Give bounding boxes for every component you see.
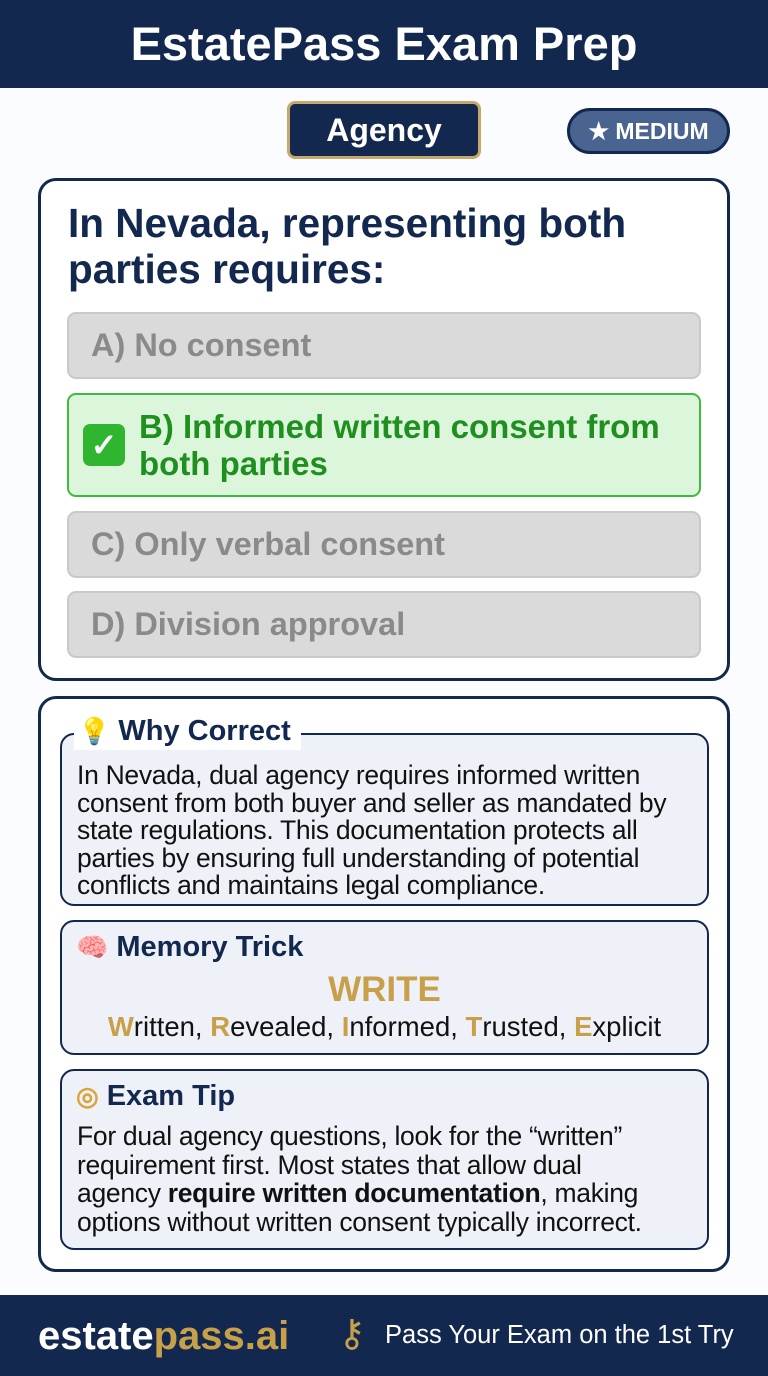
panel: explanation card (38, 696, 730, 1272)
heading: exam tip: ◎ (76, 1081, 99, 1111)
box: why correct: state regulations. This documentation protects all (77, 815, 637, 845)
exam tip text (77, 1121, 642, 1236)
exam tip text: agency require written documentation, making (77, 1178, 638, 1208)
heading: exam tip: Exam Tip (107, 1080, 235, 1112)
option C (67, 511, 701, 578)
option D: D) Division approval (91, 606, 405, 642)
option A (67, 312, 701, 379)
category pill: Agency: Agency (326, 112, 442, 148)
footer logo: estatepass.ai (38, 1314, 289, 1358)
box: memory trick (60, 920, 709, 1055)
difficulty pill: medium (567, 108, 730, 154)
difficulty pill: medium: ★ MEDIUM (588, 118, 709, 144)
option C: C) Only verbal consent (91, 526, 445, 562)
box: why correct: consent from both buyer and seller as mandated by (77, 788, 666, 818)
category pill: Agency (287, 101, 481, 159)
question text (68, 200, 626, 292)
option B correct: ✓ (91, 427, 117, 463)
box: exam tip (60, 1069, 709, 1250)
header bar (0, 0, 768, 88)
heading: why correct (74, 712, 301, 750)
option B correct: both parties (139, 445, 328, 482)
box: why correct: In Nevada, dual agency requires informed written (77, 760, 640, 790)
icon: key: ⚷ (338, 1313, 366, 1355)
question text: In Nevada, representing both (68, 200, 626, 246)
heading: memory trick: Memory Trick (116, 931, 303, 963)
header bar: EstatePass Exam Prep (131, 17, 637, 70)
exam tip text: requirement first. Most states that allow dual (77, 1150, 582, 1180)
box: why correct: parties by ensuring full understanding of potential (77, 842, 639, 872)
heading: memory trick: 🧠 (76, 932, 108, 962)
exam tip text: For dual agency questions, look for the “written” (77, 1121, 622, 1151)
mnemonic words: Written, Revealed, Informed, Trusted, Explicit (108, 1011, 661, 1042)
exam tip text: options without written consent typically incorrect. (77, 1206, 642, 1236)
box: why correct: conflicts and maintains legal compliance. (77, 870, 545, 900)
heading: why correct: 💡 (78, 716, 110, 746)
option D (67, 591, 701, 658)
heading: why correct: Why Correct (118, 714, 291, 746)
footer tagline: Pass Your Exam on the 1st Try (385, 1321, 734, 1349)
question text: parties requires: (68, 246, 385, 292)
panel: question card (38, 178, 730, 681)
mnemonic WRITE: WRITE (328, 970, 441, 1009)
option A: A) No consent (91, 327, 311, 363)
option B correct: B) Informed written consent from (139, 408, 660, 445)
option B correct (67, 393, 701, 497)
box: why correct (60, 733, 709, 906)
footer bar (0, 1295, 768, 1376)
